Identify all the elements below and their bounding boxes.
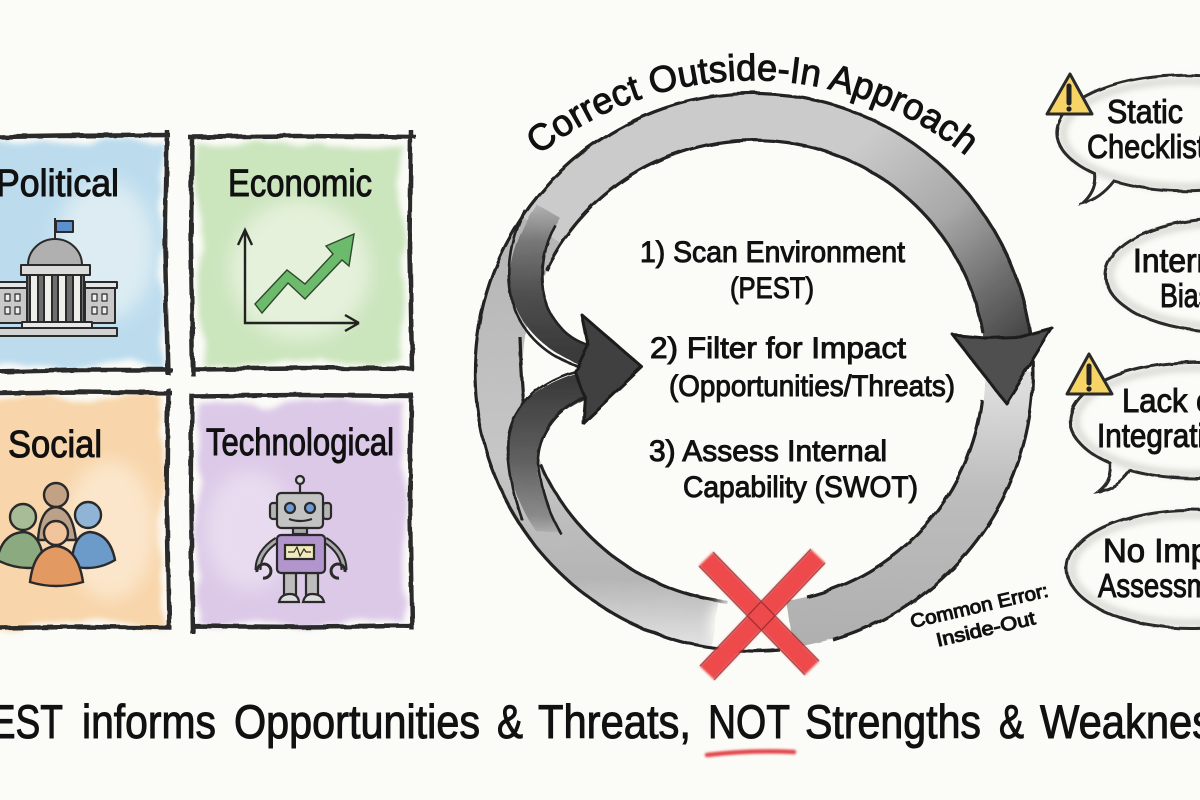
arrowhead: right	[953, 328, 1052, 403]
title: Correct Outside-In Approach: Correct Outside-In Approach	[528, 52, 975, 156]
text: internal bias	[1133, 242, 1200, 314]
text: step 2: 2) Filter for Impact	[650, 332, 907, 365]
icon: group of people	[0, 483, 115, 586]
text: step 1: 1) Scan Environment	[640, 236, 906, 269]
takeaway sentence: Opportunities	[234, 695, 480, 748]
ring: lower right arc	[790, 372, 1009, 624]
text: static checklist: Static	[1107, 93, 1183, 130]
callout: common error: Common Error:	[908, 581, 1051, 633]
text: static checklist	[1087, 93, 1200, 165]
icon: rising chart	[238, 230, 359, 331]
text: step 3: 3) Assess Internal	[649, 435, 887, 468]
panel: political	[0, 130, 172, 375]
panel: social	[0, 388, 172, 630]
heading: Economic: Economic	[228, 163, 372, 205]
icon: red X	[699, 549, 825, 680]
takeaway sentence: &	[999, 695, 1024, 748]
ring: upper arc with arrow to the right	[542, 116, 1008, 345]
ring: outer outline	[475, 93, 1033, 651]
heading: Technological: Technological	[206, 422, 394, 464]
ring: lower left arc	[499, 230, 727, 624]
ring: soft fade beside the cross	[710, 596, 750, 656]
callout: common error	[908, 581, 1056, 656]
arrow: lower inward arrow	[508, 370, 590, 535]
takeaway sentence	[0, 695, 1200, 755]
takeaway sentence: &	[497, 695, 523, 748]
icon: warning triangle	[1047, 74, 1092, 114]
text: step 2: (Opportunities/Threats)	[669, 370, 955, 403]
text: step 1	[640, 236, 906, 305]
speech bubble: internal bias	[1105, 218, 1200, 332]
speech bubble: lack of integration	[1067, 354, 1200, 491]
text: step 3	[649, 435, 918, 504]
text: no impact assessment	[1098, 532, 1200, 604]
takeaway sentence: informs	[82, 695, 216, 748]
takeaway sentence: Threats,	[538, 695, 691, 748]
panel: economic	[188, 130, 416, 376]
takeaway sentence: NOT	[708, 695, 790, 748]
diagram: outside-in cycle	[474, 52, 1054, 681]
speech bubble: static checklist	[1047, 74, 1200, 203]
arrow: upper inward arrow	[509, 205, 592, 368]
heading: Social: Social	[8, 424, 102, 466]
icon: warning triangle	[1067, 354, 1112, 394]
arrowhead: inward	[575, 315, 642, 423]
underline: NOT	[707, 751, 794, 755]
icon: capitol building	[0, 218, 117, 336]
text: step 2	[650, 332, 955, 403]
text: step 3: Capability (SWOT)	[683, 471, 918, 504]
speech bubble: no impact assessment	[1067, 510, 1200, 628]
text: step 1: (PEST)	[730, 272, 814, 305]
takeaway sentence: Strengths	[805, 695, 981, 748]
icon: robot	[257, 476, 345, 602]
panel: technological	[190, 393, 414, 634]
callout: common error: Inside-Out	[934, 608, 1038, 652]
text: lack of integration	[1097, 382, 1200, 454]
